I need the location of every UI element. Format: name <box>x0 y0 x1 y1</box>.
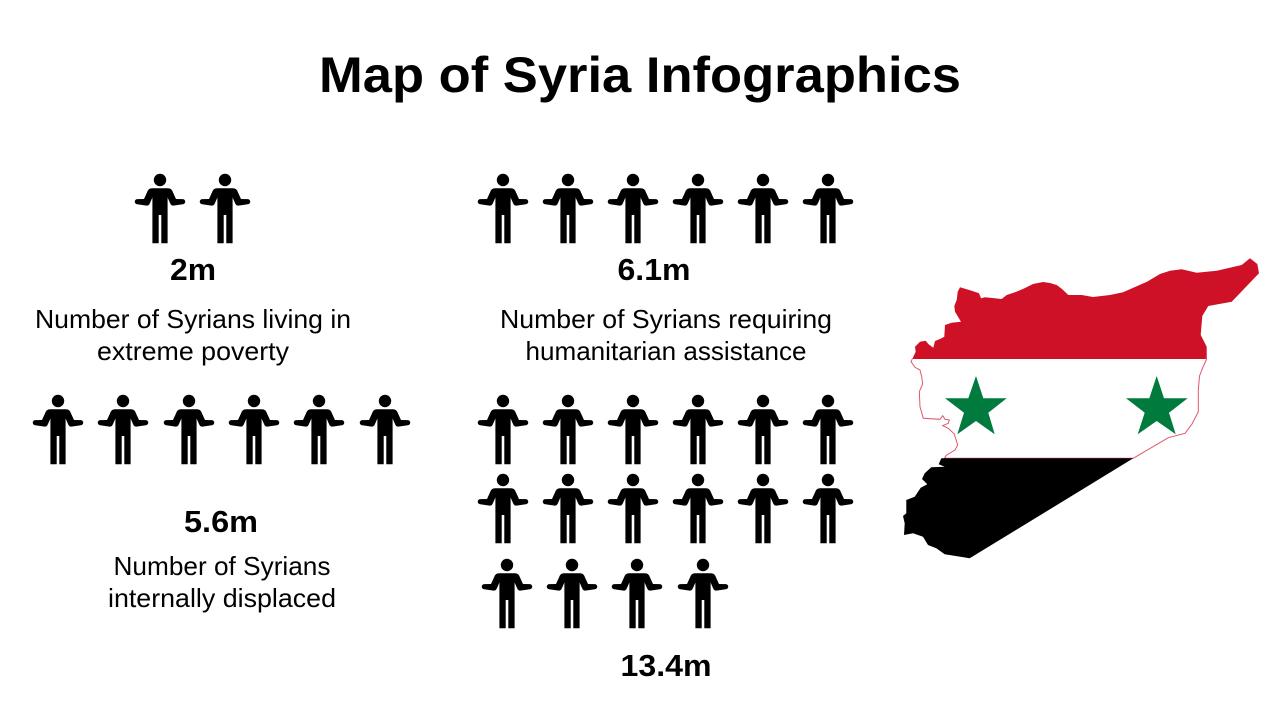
value: 2m: 2m <box>170 252 216 287</box>
icon: right green star <box>1126 376 1188 434</box>
icon: left green star <box>945 376 1007 434</box>
value: 13.4m: 13.4m <box>620 648 712 683</box>
stat group: 5.6m internally displaced <box>33 395 410 613</box>
title: Map of Syria Infographics <box>319 47 961 103</box>
map: Syria with flag colours <box>903 258 1259 558</box>
map band: white outlined <box>911 359 1207 458</box>
stat group: 6.1m humanitarian assistance <box>478 174 853 366</box>
description: extreme poverty: extreme poverty <box>97 336 289 366</box>
value: 5.6m: 5.6m <box>184 504 258 539</box>
value: 6.1m: 6.1m <box>618 252 690 287</box>
description: humanitarian assistance: Number of Syrians requiring <box>500 304 832 334</box>
map band: black <box>903 458 1133 558</box>
description: extreme poverty: Number of Syrians living in <box>35 304 351 334</box>
map band: red <box>912 258 1259 359</box>
stat group: 2m extreme poverty <box>35 174 351 366</box>
description: internally displaced: Number of Syrians <box>114 551 330 581</box>
pictogram: 16 people <box>478 395 853 628</box>
pictogram: 6 people <box>33 395 410 464</box>
pictogram: 2 people <box>135 174 250 243</box>
description: humanitarian assistance: humanitarian assistance <box>526 336 806 366</box>
pictogram: 6 people <box>478 174 853 243</box>
stat group: 13.4m <box>478 395 853 683</box>
description: internally displaced: internally displaced <box>108 583 336 613</box>
